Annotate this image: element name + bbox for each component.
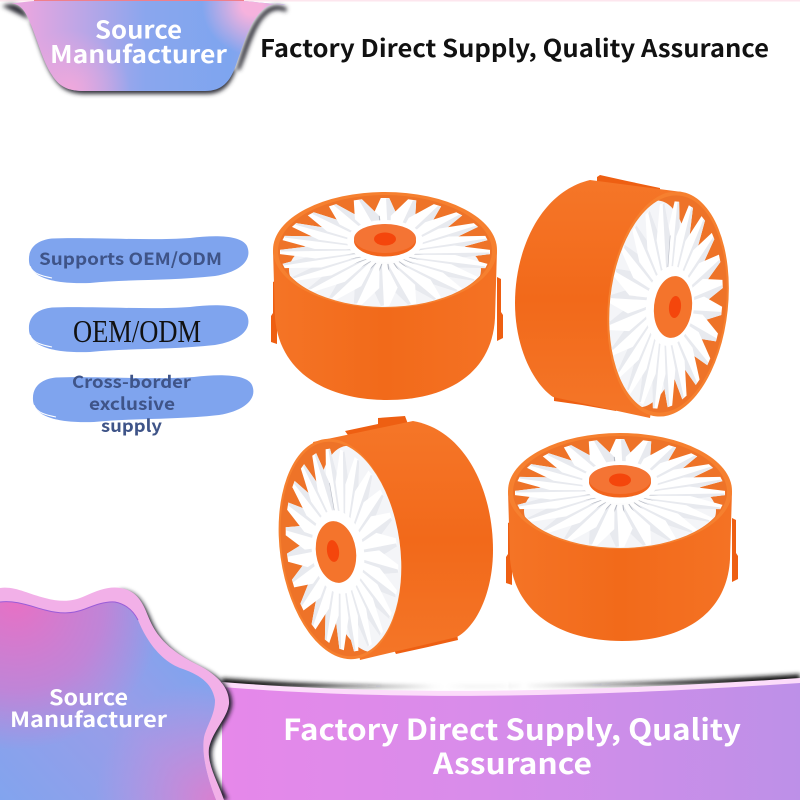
feature pill: OEM/ODM: OEM/ODM — [73, 313, 201, 349]
badge text — [50, 10, 228, 70]
bottom-left blob badge: Source Manufacturer — [0, 587, 232, 800]
product: filter wheel, top left — [271, 192, 503, 400]
product: filter wheel, bottom left — [265, 416, 493, 667]
blob text: Source — [49, 682, 128, 712]
banner text: Factory Direct Supply, Quality — [283, 707, 741, 749]
blob text: Manufacturer — [10, 704, 168, 734]
feature pill: OEM/ODM — [29, 305, 248, 352]
product: filter wheel, bottom right — [506, 433, 738, 641]
feature pill: Cross-border exclusive supply — [33, 368, 253, 437]
badge text: Manufacturer — [50, 35, 228, 70]
feature pill: Cross-border exclusive supply: Cross-border — [72, 368, 192, 393]
feature pill: Supports OEM/ODM — [29, 236, 248, 283]
banner text: Assurance — [432, 741, 592, 783]
blob text — [10, 682, 168, 734]
badge text: Source — [95, 10, 182, 46]
feature pill: Cross-border exclusive supply: supply — [101, 412, 162, 437]
bottom banner — [222, 674, 800, 800]
top-left badge: Source Manufacturer — [2, 1, 287, 94]
banner text — [283, 707, 741, 783]
title: Factory Direct Supply, Quality Assurance — [260, 29, 769, 64]
product: filter wheel, top right — [515, 175, 739, 423]
top edge strip — [0, 0, 800, 2]
feature pill: Supports OEM/ODM: Supports OEM/ODM — [39, 245, 222, 270]
feature pill: Cross-border exclusive supply: exclusive — [89, 390, 175, 415]
